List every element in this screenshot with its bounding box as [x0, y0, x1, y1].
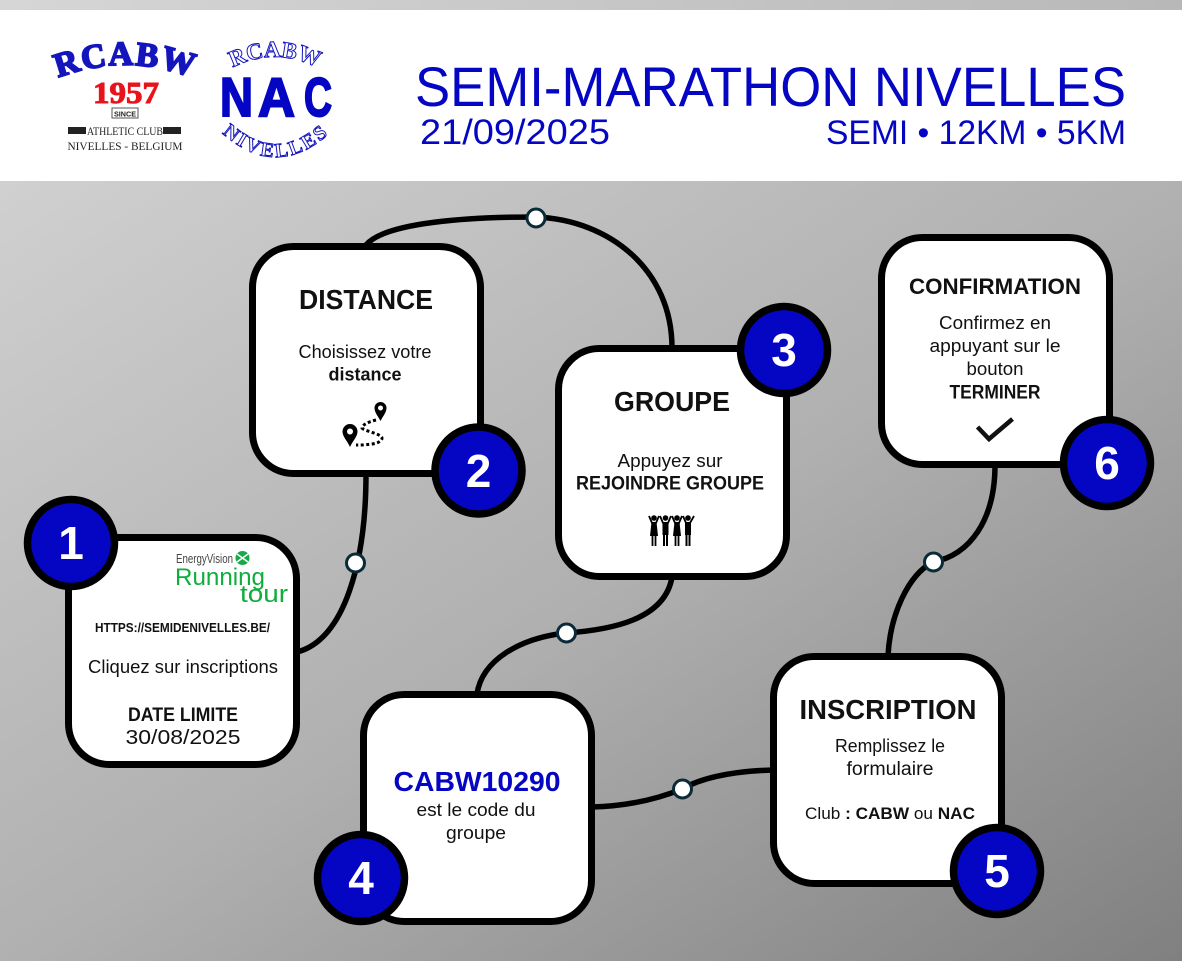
- connector node 5-6: [924, 553, 942, 571]
- badge 4: 4: [348, 852, 374, 904]
- panel: step 2: [252, 246, 480, 474]
- logo: NAC: A: [258, 66, 295, 128]
- icon: check mark: [978, 419, 1012, 439]
- text line 1: Confirmez en: [939, 312, 1051, 333]
- distances: SEMI • 12KM • 5KM: [826, 114, 1126, 152]
- badge 5: [954, 828, 1040, 914]
- date: 21/09/2025: [420, 113, 610, 152]
- connector node 2-3: [527, 209, 545, 227]
- deadline label: DATE LIMITE: [128, 704, 238, 726]
- connector: step 4 to step 5: [592, 770, 773, 807]
- panel: step 1: [68, 538, 296, 764]
- text: Choisissez votre: [298, 341, 432, 362]
- text line 2: formulaire: [846, 759, 934, 780]
- text line 1: est le code du: [416, 799, 536, 820]
- connector node 1-2: [346, 554, 364, 572]
- club: Club : CABW ou NAC: [805, 804, 975, 823]
- connector node 4-5: [674, 780, 692, 798]
- badge 2: 2: [466, 445, 491, 497]
- logo: RCABW 1957: [50, 42, 198, 153]
- text line 2: groupe: [446, 822, 506, 843]
- badge 6: 6: [1094, 437, 1120, 489]
- deadline date: 30/08/2025: [126, 726, 240, 749]
- logo: EnergyVision Running tour: EnergyVision: [176, 551, 233, 566]
- connector node 3-4: [558, 624, 576, 642]
- icon: route with pins: [342, 402, 386, 447]
- logo: EnergyVision Running tour: tour: [240, 581, 288, 608]
- text: Appuyez sur: [618, 450, 722, 471]
- logo: EnergyVision Running tour: [175, 551, 288, 608]
- badge 5: 5: [984, 845, 1010, 897]
- logo: RCABW 1957: ATHLETIC CLUB: [87, 126, 163, 138]
- connector: step 5 to step 6: [888, 465, 995, 656]
- text line 1: Remplissez le: [835, 735, 945, 756]
- logo: NAC: NIVELLES: [222, 122, 327, 158]
- panel: step 3: [558, 348, 786, 576]
- bold text: TERMINER: [950, 382, 1040, 404]
- logo: EnergyVision Running tour: Running: [175, 564, 265, 591]
- logo: RCABW 1957: SINCE: [114, 110, 136, 118]
- logo: NAC: C: [304, 66, 332, 128]
- text line 2: appuyant sur le: [930, 335, 1060, 356]
- badge 4: [318, 834, 404, 922]
- heading: DISTANCE: [299, 284, 433, 315]
- panel: step 6: [882, 238, 1110, 464]
- heading: CONFIRMATION: [909, 274, 1081, 299]
- group code: CABW10290: [394, 766, 560, 797]
- connector: step 1 to step 2: [297, 474, 366, 652]
- logo: RCABW 1957: 1957: [93, 75, 159, 110]
- icon: group of people: [649, 515, 694, 546]
- badge 6: [1064, 420, 1150, 506]
- bold text: REJOINDRE GROUPE: [576, 472, 764, 494]
- badge 3: 3: [771, 324, 797, 376]
- top strip: [0, 0, 1182, 10]
- heading: INSCRIPTION: [800, 694, 976, 725]
- logo: NAC: [220, 41, 332, 158]
- logo: RCABW 1957: NIVELLES - BELGIUM: [68, 139, 183, 153]
- badge 2: [435, 427, 522, 514]
- heading: GROUPE: [614, 386, 730, 417]
- bold text: distance: [328, 364, 402, 384]
- panel: step 4: [364, 694, 592, 922]
- url: HTTPS://SEMIDENIVELLES.BE/: [95, 621, 270, 635]
- connector: step 2 to step 3: [366, 217, 672, 348]
- logo: NAC: N: [220, 66, 253, 128]
- connector: step 3 to step 4: [477, 577, 672, 694]
- title: SEMI-MARATHON NIVELLES: [415, 55, 1126, 118]
- text line 3: bouton: [966, 358, 1024, 379]
- badge 1: [28, 500, 114, 586]
- badge 1: 1: [58, 517, 84, 569]
- logo: NAC: RCABW: [226, 41, 324, 68]
- badge 3: [740, 306, 828, 394]
- logo: RCABW 1957: RCABW: [50, 42, 198, 78]
- instruction: Cliquez sur inscriptions: [88, 656, 278, 677]
- header panel: [50, 41, 1126, 158]
- panel: step 5: [774, 656, 1002, 884]
